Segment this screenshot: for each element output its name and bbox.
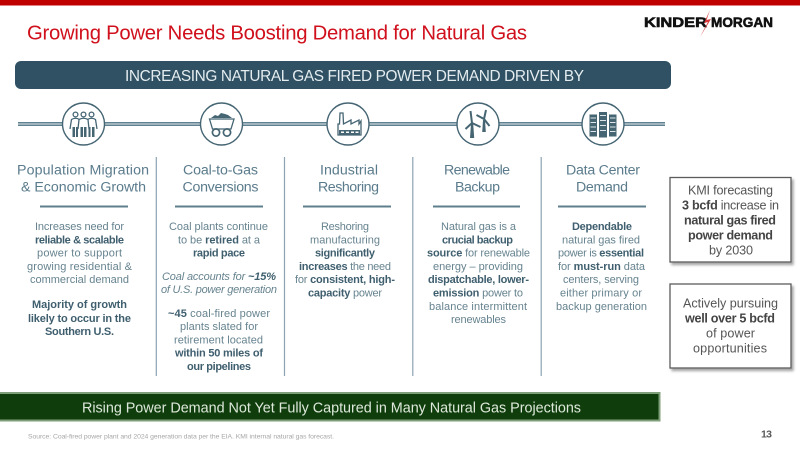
text: reshoring column: manufacturing [310,234,380,246]
text: data center column [556,221,647,313]
icon: wind turbines [457,103,499,145]
text: reshoring column: capacity power [308,288,382,300]
text: data center column: either primary or [560,288,642,300]
text: population column: Majority of growth [32,299,127,311]
callout: power opportunities: well over 5 bcfd [684,312,775,326]
heading: data center demand: Data Center [566,162,640,178]
callout: KMI forecast: by 2030 [709,244,753,258]
heading: coal-to-gas [175,162,263,208]
callout: power opportunities: of power [706,326,755,340]
text: data center column: for must-run data [558,261,646,273]
column dividers [156,157,541,376]
heading: industrial reshoring: Reshoring [318,180,379,196]
text: coal column: our pipelines [187,361,251,373]
text: coal column: Coal accounts for ~15% [162,271,276,283]
text: renewable column: renewables [451,314,506,326]
source note: Source: Coal-fired power plant and 2024 generation data per the EIA. KMI internal natural gas forecast. [28,434,334,440]
heading: coal-to-gas: Conversions [182,180,258,196]
icon: factory [327,103,369,145]
text: renewable column: Natural gas is a [441,221,517,233]
text: population column: commercial demand [30,274,129,286]
text: renewable column: source for renewable [427,248,530,260]
heading: industrial reshoring: Industrial [320,162,378,178]
text: coal column: to be retired at a [178,234,261,246]
text: population column: likely to occur in the [28,313,131,325]
text: population column: growing residential & [27,261,133,273]
text: renewable column: dispatchable, lower- [428,274,529,286]
logo: Kinder Morgan [644,10,773,37]
bottom takeaway banner [0,393,660,420]
text: renewable column [427,221,530,326]
text: population column: Increases need for [35,221,124,233]
text: coal column: retirement located [174,334,263,346]
text: reshoring column: significantly [315,248,376,260]
heading: population migration [17,162,149,208]
logo: Kinder Morgan: MORGAN [711,14,773,30]
title: Growing Power Needs Boosting Demand for Natural Gas [27,22,527,44]
text: data center column: power is essential [558,248,644,260]
heading: industrial reshoring [303,162,391,208]
text: renewable column: crucial backup [442,234,513,246]
text: coal column: Coal plants continue [169,221,268,233]
callout: KMI forecast: power demand [688,228,773,242]
heading: population migration: & Economic Growth [21,180,146,196]
icon: coal cart [200,103,242,145]
callout: KMI forecast: KMI forecasting [688,184,773,198]
heading: population migration: Population Migration [17,162,149,178]
heading: renewable backup: Backup [455,180,500,196]
heading: renewable backup: Renewable [444,162,510,178]
text: population column: Southern U.S. [45,326,114,338]
text: population column: power to support [37,248,122,260]
callout: power opportunities [670,284,791,368]
timeline connector [18,122,665,126]
text: coal column: within 50 miles of [174,348,263,360]
header banner [15,61,671,89]
text: renewable column: energy – providing [433,261,523,273]
text: renewable column: balance intermittent [429,301,527,313]
logo: Kinder Morgan: KINDER [644,14,707,30]
text: coal column [161,221,277,373]
text: data center column: natural gas fired [562,234,640,246]
heading: renewable backup [433,162,520,208]
icon: data center servers [582,103,624,145]
text: coal column: ~45 coal-fired power [168,308,270,320]
text: reshoring column: for consistent, high- [295,274,395,286]
callout: power opportunities: opportunities [693,342,767,356]
icon: people [62,103,104,145]
text: reshoring column [295,221,395,300]
text: data center column: backup generation [556,301,647,313]
text: data center column: Dependable [572,221,632,233]
text: data center column: centers, serving [563,274,639,286]
text: reshoring column: Reshoring [321,221,369,233]
heading: data center demand [558,162,646,208]
text: coal column: of U.S. power generation [161,284,277,296]
heading: data center demand: Demand [576,180,628,196]
text: renewable column: emission power to [433,288,523,300]
text: coal column: rapid pace [193,248,245,260]
callout: KMI forecast: 3 bcfd increase in [682,198,779,212]
text: coal column: plants slated for [180,321,258,333]
bottom takeaway banner: Rising Power Demand Not Yet Fully Captured in Many Natural Gas Projections [82,400,581,416]
page number: 13 [761,428,772,440]
header banner: INCREASING NATURAL GAS FIRED POWER DEMAND DRIVEN BY [125,68,584,85]
top red bar [0,0,800,6]
text: population column [27,221,133,338]
text: reshoring column: increases the need [299,261,391,273]
callout: KMI forecast: natural gas fired [684,214,776,228]
text: population column: reliable & scalable [35,234,124,246]
callout: KMI forecast [670,178,791,262]
callout: power opportunities: Actively pursuing [683,296,778,310]
heading: coal-to-gas: Coal-to-Gas [183,162,258,178]
